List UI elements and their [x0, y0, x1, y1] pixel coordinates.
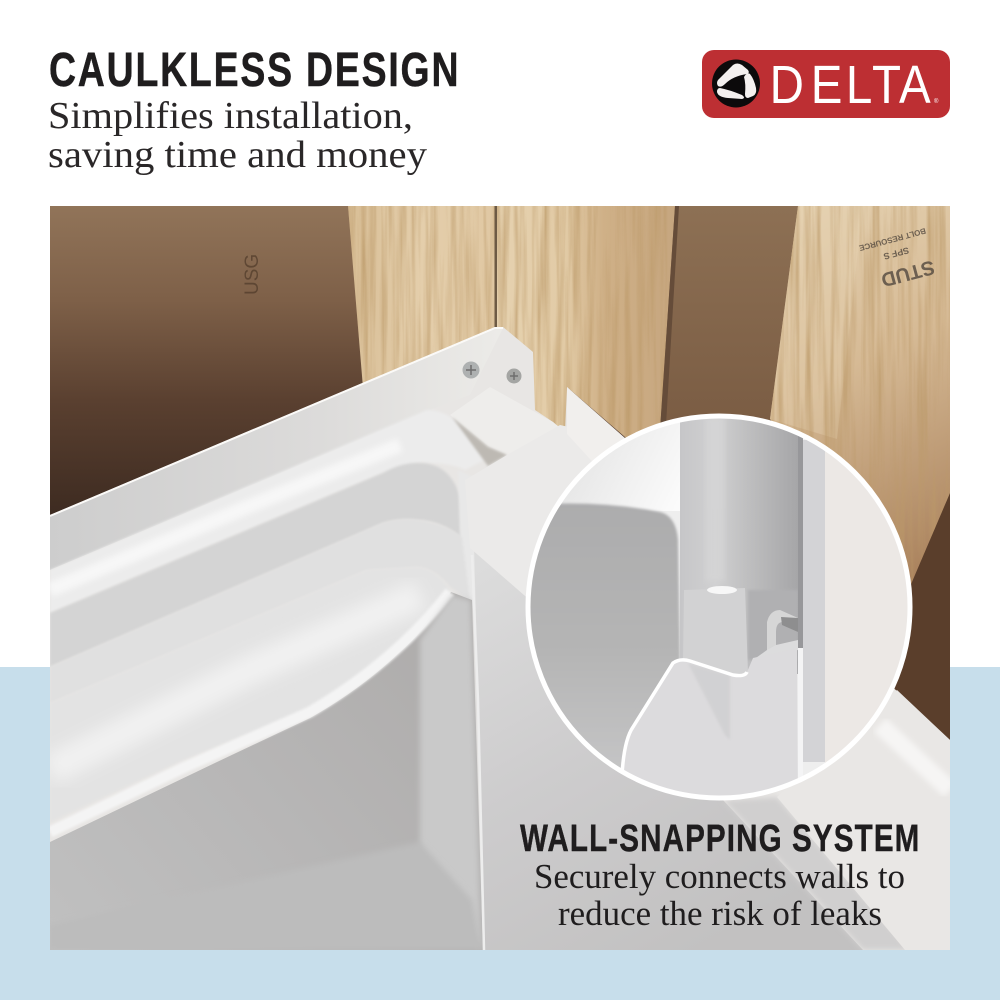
wood grain texture [348, 206, 950, 610]
callout: wall-snapping system: reduce the risk of leaks [558, 894, 882, 933]
stud stamp: SPF S [882, 245, 910, 262]
wall shadow by stud [660, 206, 679, 430]
title: CAULKLESS DESIGN [49, 44, 458, 97]
subtitle: saving time and money [48, 134, 427, 176]
panel: installation photo [50, 206, 950, 950]
tub flange strip [50, 385, 364, 570]
recess right side strip [420, 595, 481, 950]
shelf sheen [50, 595, 420, 770]
logo: Delta [702, 50, 950, 118]
callout: wall-snapping system: WALL-SNAPPING SYSTEM [520, 818, 919, 860]
stud stamp: BOLT RESOURCE [857, 226, 927, 253]
shelf front lip [50, 592, 450, 832]
snap piece outline [622, 660, 747, 775]
rim corner strip [458, 495, 462, 536]
inner lip band [460, 549, 465, 588]
wood stud 3 [770, 206, 950, 610]
stud stamp [859, 228, 934, 286]
lower recess [50, 592, 483, 950]
column [680, 416, 798, 674]
ledge bright ridge [880, 725, 950, 790]
flange edge highlight [50, 328, 503, 516]
corner tab [552, 421, 558, 426]
left grey panel [528, 504, 680, 775]
bottom shadow band [723, 797, 910, 950]
shelf top [50, 567, 450, 822]
callout: wall-snapping system [520, 818, 919, 933]
rim ridge highlight [50, 445, 400, 590]
stud stamp: STUD [879, 255, 937, 291]
nub [707, 586, 737, 594]
upper rim band [50, 414, 420, 570]
wood stud 2 [497, 206, 675, 450]
corner block [474, 425, 566, 596]
clip base [753, 640, 798, 660]
subtitle [48, 95, 427, 176]
blue lower band [0, 667, 1000, 1000]
corner seam [472, 555, 484, 950]
right pale wall [825, 416, 915, 808]
wall lower right [894, 494, 950, 740]
screw 2 [506, 368, 522, 384]
logo: Delta: ® [934, 98, 939, 105]
magnified inset circle [528, 416, 915, 810]
recess floor [376, 846, 477, 947]
lower strip [798, 648, 803, 808]
metal strip [803, 440, 825, 762]
logo: Delta: DELTA [770, 54, 931, 115]
inner wall band [50, 463, 462, 667]
column recess [748, 590, 798, 660]
right wall panel [474, 545, 863, 950]
callout: wall-snapping system: Securely connects walls to [534, 857, 905, 896]
metal strip dark edge [798, 416, 803, 650]
snap piece fold [688, 663, 730, 740]
USG stamp on wall: USG [242, 254, 263, 295]
notch shadow [452, 417, 507, 466]
left light area [648, 442, 680, 511]
clip [767, 610, 798, 652]
wall right section [666, 302, 785, 421]
clip slot [781, 617, 798, 632]
column front [683, 588, 748, 675]
gap between studs [494, 206, 497, 331]
screw 1 [462, 362, 480, 378]
back vertical plate [567, 387, 625, 439]
back wall [50, 206, 626, 515]
wood stud 3 fold [770, 223, 850, 439]
tub base [50, 327, 950, 950]
bottom right ledge [777, 690, 950, 950]
column highlight [705, 416, 725, 581]
lower snap piece [622, 648, 798, 810]
title [48, 44, 458, 176]
subtitle: Simplifies installation, [48, 95, 413, 137]
wood stud 1 [348, 206, 495, 400]
